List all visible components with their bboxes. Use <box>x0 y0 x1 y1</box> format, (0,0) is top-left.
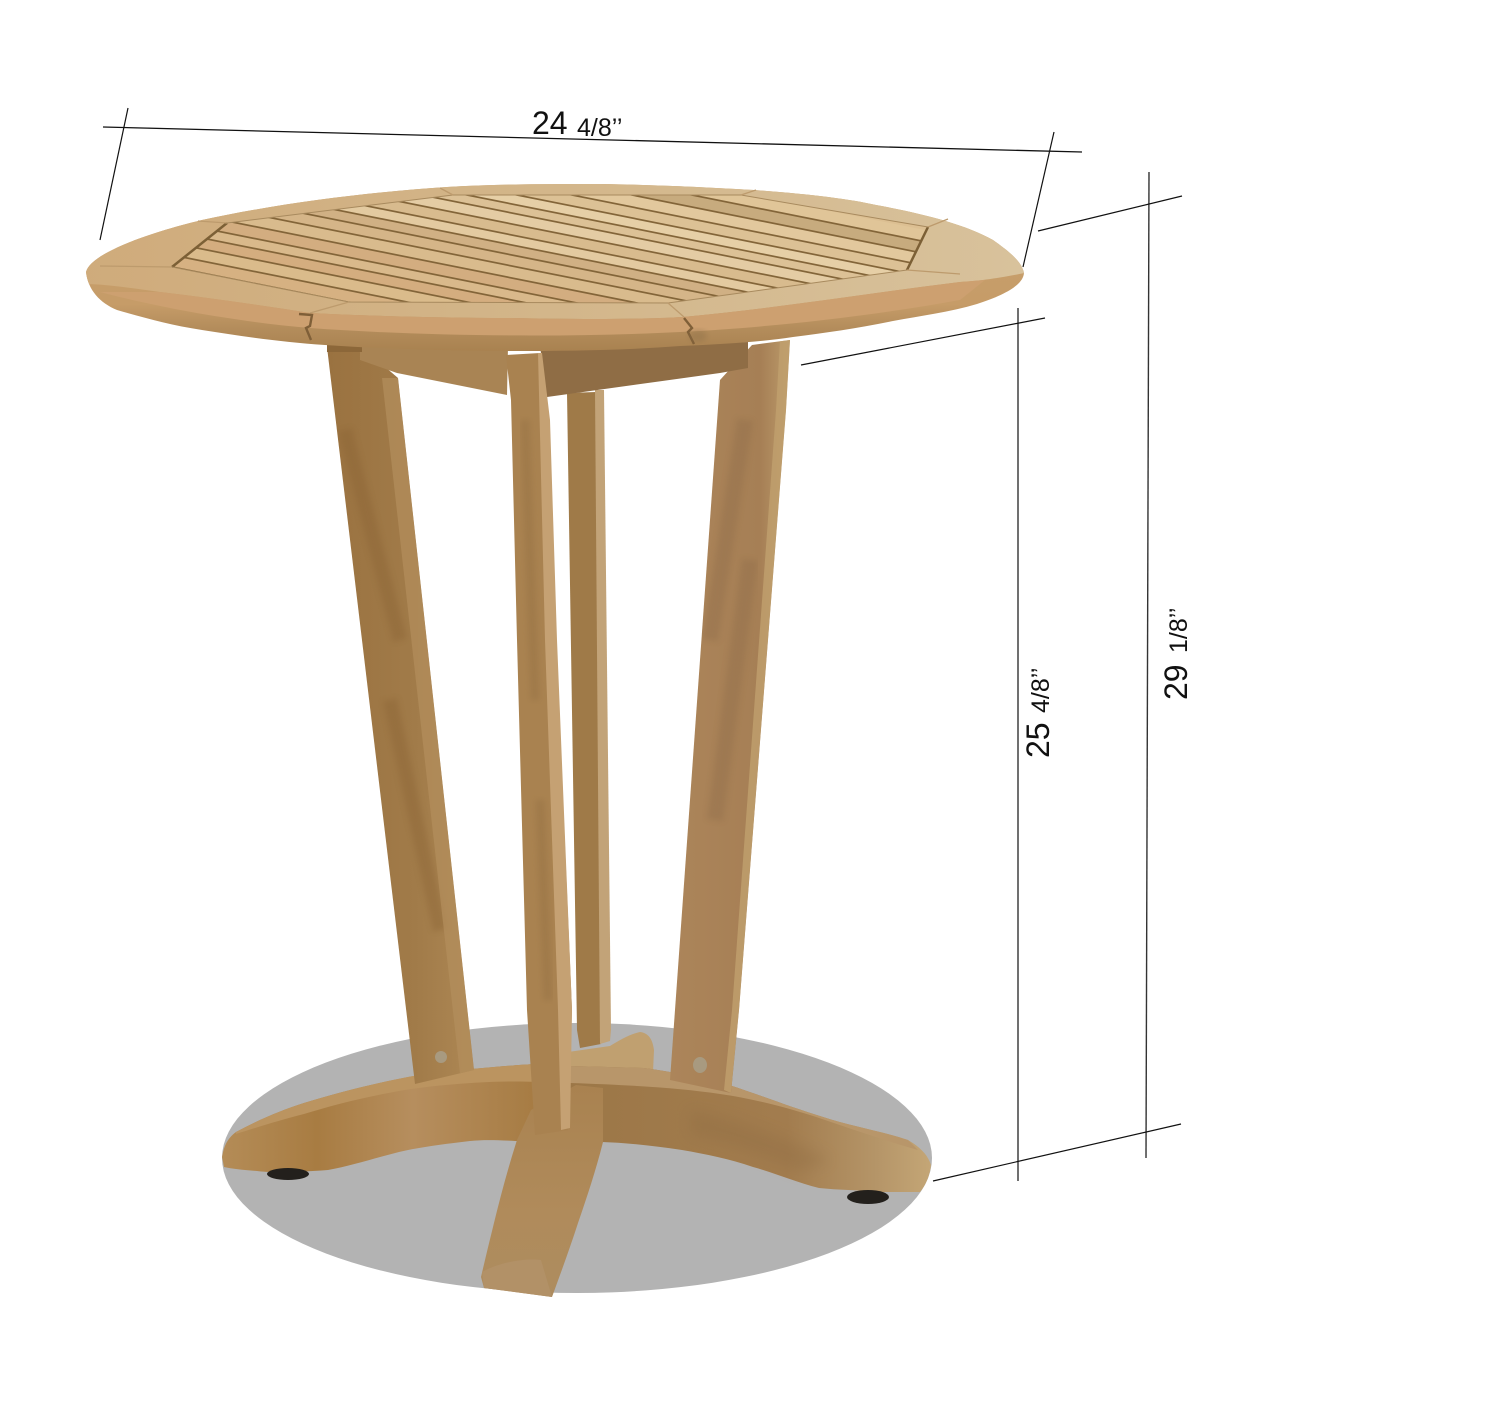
slatted centre <box>174 196 925 302</box>
dimension: table diameter <box>100 105 1082 267</box>
total height label: 1/8’’ <box>1165 608 1193 653</box>
rim mitre ridges <box>100 188 960 317</box>
back foot of base <box>568 1032 654 1072</box>
front foot of base <box>481 1085 603 1297</box>
right leg <box>670 340 790 1093</box>
floor shadow footprint <box>222 1023 932 1293</box>
apron under tabletop <box>327 342 748 397</box>
total height label: 29 <box>1158 664 1194 700</box>
dimension: apron height <box>801 308 1056 1181</box>
mitre joints <box>299 314 707 344</box>
tabletop edge <box>86 184 1024 351</box>
diameter label: 24 <box>532 105 568 141</box>
centre front leg <box>506 353 572 1135</box>
apron height label: 25 <box>1020 722 1056 758</box>
tabletop <box>86 184 1024 351</box>
back leg <box>567 390 611 1048</box>
front rim colour band <box>100 280 985 335</box>
table photo illustration <box>80 75 1030 1297</box>
rubber glides <box>267 1168 889 1204</box>
left leg <box>327 347 474 1084</box>
right base arm <box>570 1066 931 1192</box>
apron height label: 4/8’’ <box>1027 668 1055 713</box>
dimension: total height <box>933 172 1194 1181</box>
left base arm <box>222 1064 540 1172</box>
diameter label: 4/8’’ <box>577 114 622 142</box>
slat frame outline <box>172 223 928 270</box>
upper rim surface <box>86 184 1024 319</box>
